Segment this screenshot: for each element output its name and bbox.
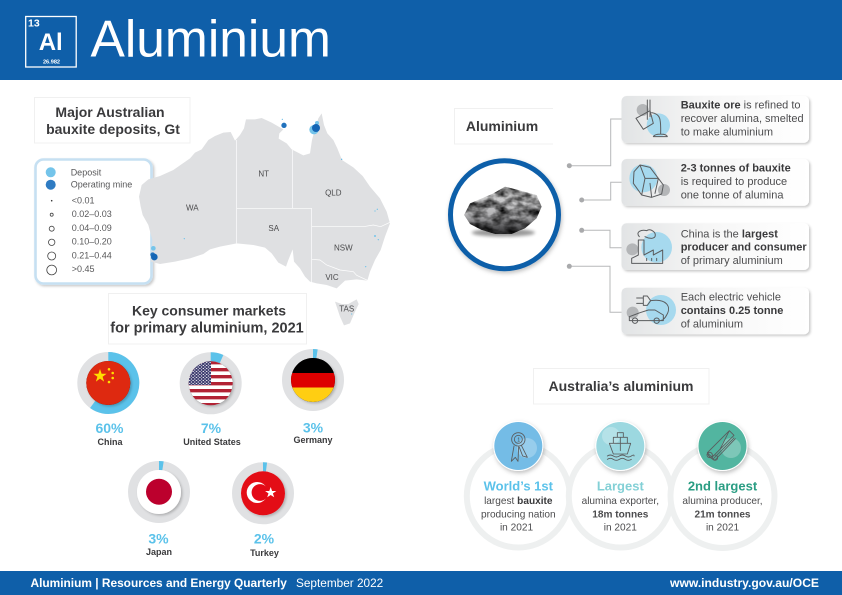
donut: Japan 3% <box>132 466 186 557</box>
card: tonnes of bauxite: is required to produce <box>681 176 787 188</box>
stat: largest alumina exporter: Largest <box>597 479 644 494</box>
icon: factory <box>626 230 672 263</box>
legend panel: 0.02–0.03 <box>72 209 112 219</box>
donut: United States 7%: 7% <box>201 420 222 436</box>
heading: key consumer markets: Key consumer markets <box>132 302 286 318</box>
donut: United States 7%: United States <box>183 437 241 447</box>
stat: second largest alumina producer: 2nd largest <box>688 479 758 494</box>
legend panel: Operating mine <box>71 180 132 190</box>
card: China: producer and consumer <box>681 242 807 254</box>
card: China: China is the largest <box>681 228 778 240</box>
card: electric vehicle: contains 0.25 tonne <box>681 305 783 317</box>
card: tonnes of bauxite: one tonne of alumina <box>681 189 784 201</box>
map of Australia: WA <box>186 204 199 212</box>
donut: Japan 3%: 3% <box>148 530 169 546</box>
icon: pouring crucible <box>636 100 670 137</box>
map of Australia: TAS <box>339 304 354 314</box>
heading: key consumer markets <box>108 294 306 344</box>
legend panel: 0.21–0.44 <box>72 250 112 260</box>
map of Australia: SA <box>268 224 280 233</box>
map of Australia: NSW <box>334 244 353 252</box>
periodic table element tile: 13 <box>28 18 40 30</box>
donut: United States 7% <box>183 357 241 447</box>
stat: second largest alumina producer: alumina producer, <box>682 496 763 507</box>
donut: Germany 3%: Germany <box>293 435 333 445</box>
card: electric vehicle: Each electric vehicle <box>681 292 781 304</box>
legend panel: >0.45 <box>72 264 94 274</box>
card: tonnes of bauxite: 2-3 tonnes of bauxite <box>681 163 791 175</box>
donut: Turkey 2%: 2% <box>254 530 275 546</box>
footer band: September 2022 <box>296 576 383 590</box>
footer band: www.industry.gov.au/OCE <box>669 576 819 590</box>
stat: second largest alumina producer: 21m tonnes <box>694 509 751 520</box>
card: bauxite ore: Bauxite ore is refined to <box>681 100 801 112</box>
heading: Aluminium <box>454 108 553 144</box>
donut: Germany 3%: 3% <box>303 420 324 436</box>
donut: China 60%: 60% <box>95 420 124 436</box>
stat: largest alumina exporter <box>569 421 672 548</box>
stat: largest alumina exporter: alumina exporter, <box>582 496 659 507</box>
card: bauxite ore: recover alumina, smelted <box>681 113 804 125</box>
donut: Japan 3%: Japan <box>146 547 172 557</box>
card: China <box>622 223 809 270</box>
map of Australia: QLD <box>325 188 342 198</box>
donut: Germany 3% <box>286 354 340 445</box>
stat: world's first bauxite: producing nation <box>481 509 556 520</box>
footer band <box>0 571 842 595</box>
card: tonnes of bauxite <box>622 159 809 206</box>
map of Australia: NT <box>258 170 269 178</box>
heading: Aluminium: Aluminium <box>466 118 538 134</box>
map of Australia <box>139 113 390 325</box>
donut: Turkey 2%: Turkey <box>250 548 279 558</box>
icon: medal badge: 1 <box>517 438 520 444</box>
card: bauxite ore: to make aluminium <box>681 126 773 138</box>
stat: second largest alumina producer <box>670 421 774 548</box>
heading: bauxite deposits: Major Australian <box>55 104 165 120</box>
aluminium rock circle <box>450 161 558 269</box>
title: Aluminium <box>90 10 331 68</box>
stat: world's first bauxite: World’s 1st <box>484 479 554 494</box>
heading: Australia's aluminium <box>534 368 709 404</box>
stat: second largest alumina producer: in 2021 <box>706 523 739 534</box>
periodic table element tile: Al <box>39 29 63 56</box>
card: China: of primary aluminium <box>681 255 783 267</box>
heading: Australia's aluminium: Australia’s aluminium <box>549 378 693 394</box>
icon: bauxite rock <box>629 164 670 197</box>
stat: largest alumina exporter: in 2021 <box>604 523 637 534</box>
stat: world's first bauxite: in 2021 <box>500 523 533 534</box>
card: bauxite ore <box>622 96 809 143</box>
legend panel: <0.01 <box>72 195 94 205</box>
card: electric vehicle <box>622 288 809 334</box>
legend panel: 0.04–0.09 <box>72 223 112 233</box>
header band <box>0 0 842 80</box>
footer band: Aluminium | Resources and Energy Quarterly <box>30 576 287 590</box>
stat: world's first bauxite: largest bauxite <box>484 496 553 507</box>
heading: key consumer markets: for primary aluminium, 2021 <box>110 320 304 336</box>
heading: bauxite deposits <box>34 98 190 143</box>
stat: largest alumina exporter: 18m tonnes <box>592 509 649 520</box>
icon: aluminium bars badge <box>698 421 748 471</box>
stat: world's first bauxite <box>467 421 570 548</box>
connector lines <box>567 119 622 312</box>
map of Australia: VIC <box>325 273 339 282</box>
donut: Turkey 2% <box>236 467 290 558</box>
periodic table element tile: 26.982 <box>43 60 60 66</box>
icon: electric car with plug <box>627 295 676 325</box>
periodic table element tile <box>26 16 76 67</box>
icon: ship badge <box>595 421 645 471</box>
legend panel: 0.10–0.20 <box>72 237 112 247</box>
heading: bauxite deposits: bauxite deposits, Gt <box>46 121 180 137</box>
donut: China 60% <box>82 356 135 447</box>
card: electric vehicle: of aluminium <box>681 318 743 330</box>
legend panel <box>36 160 152 284</box>
legend panel: Deposit <box>71 168 102 178</box>
donut: China 60%: China <box>97 437 123 447</box>
